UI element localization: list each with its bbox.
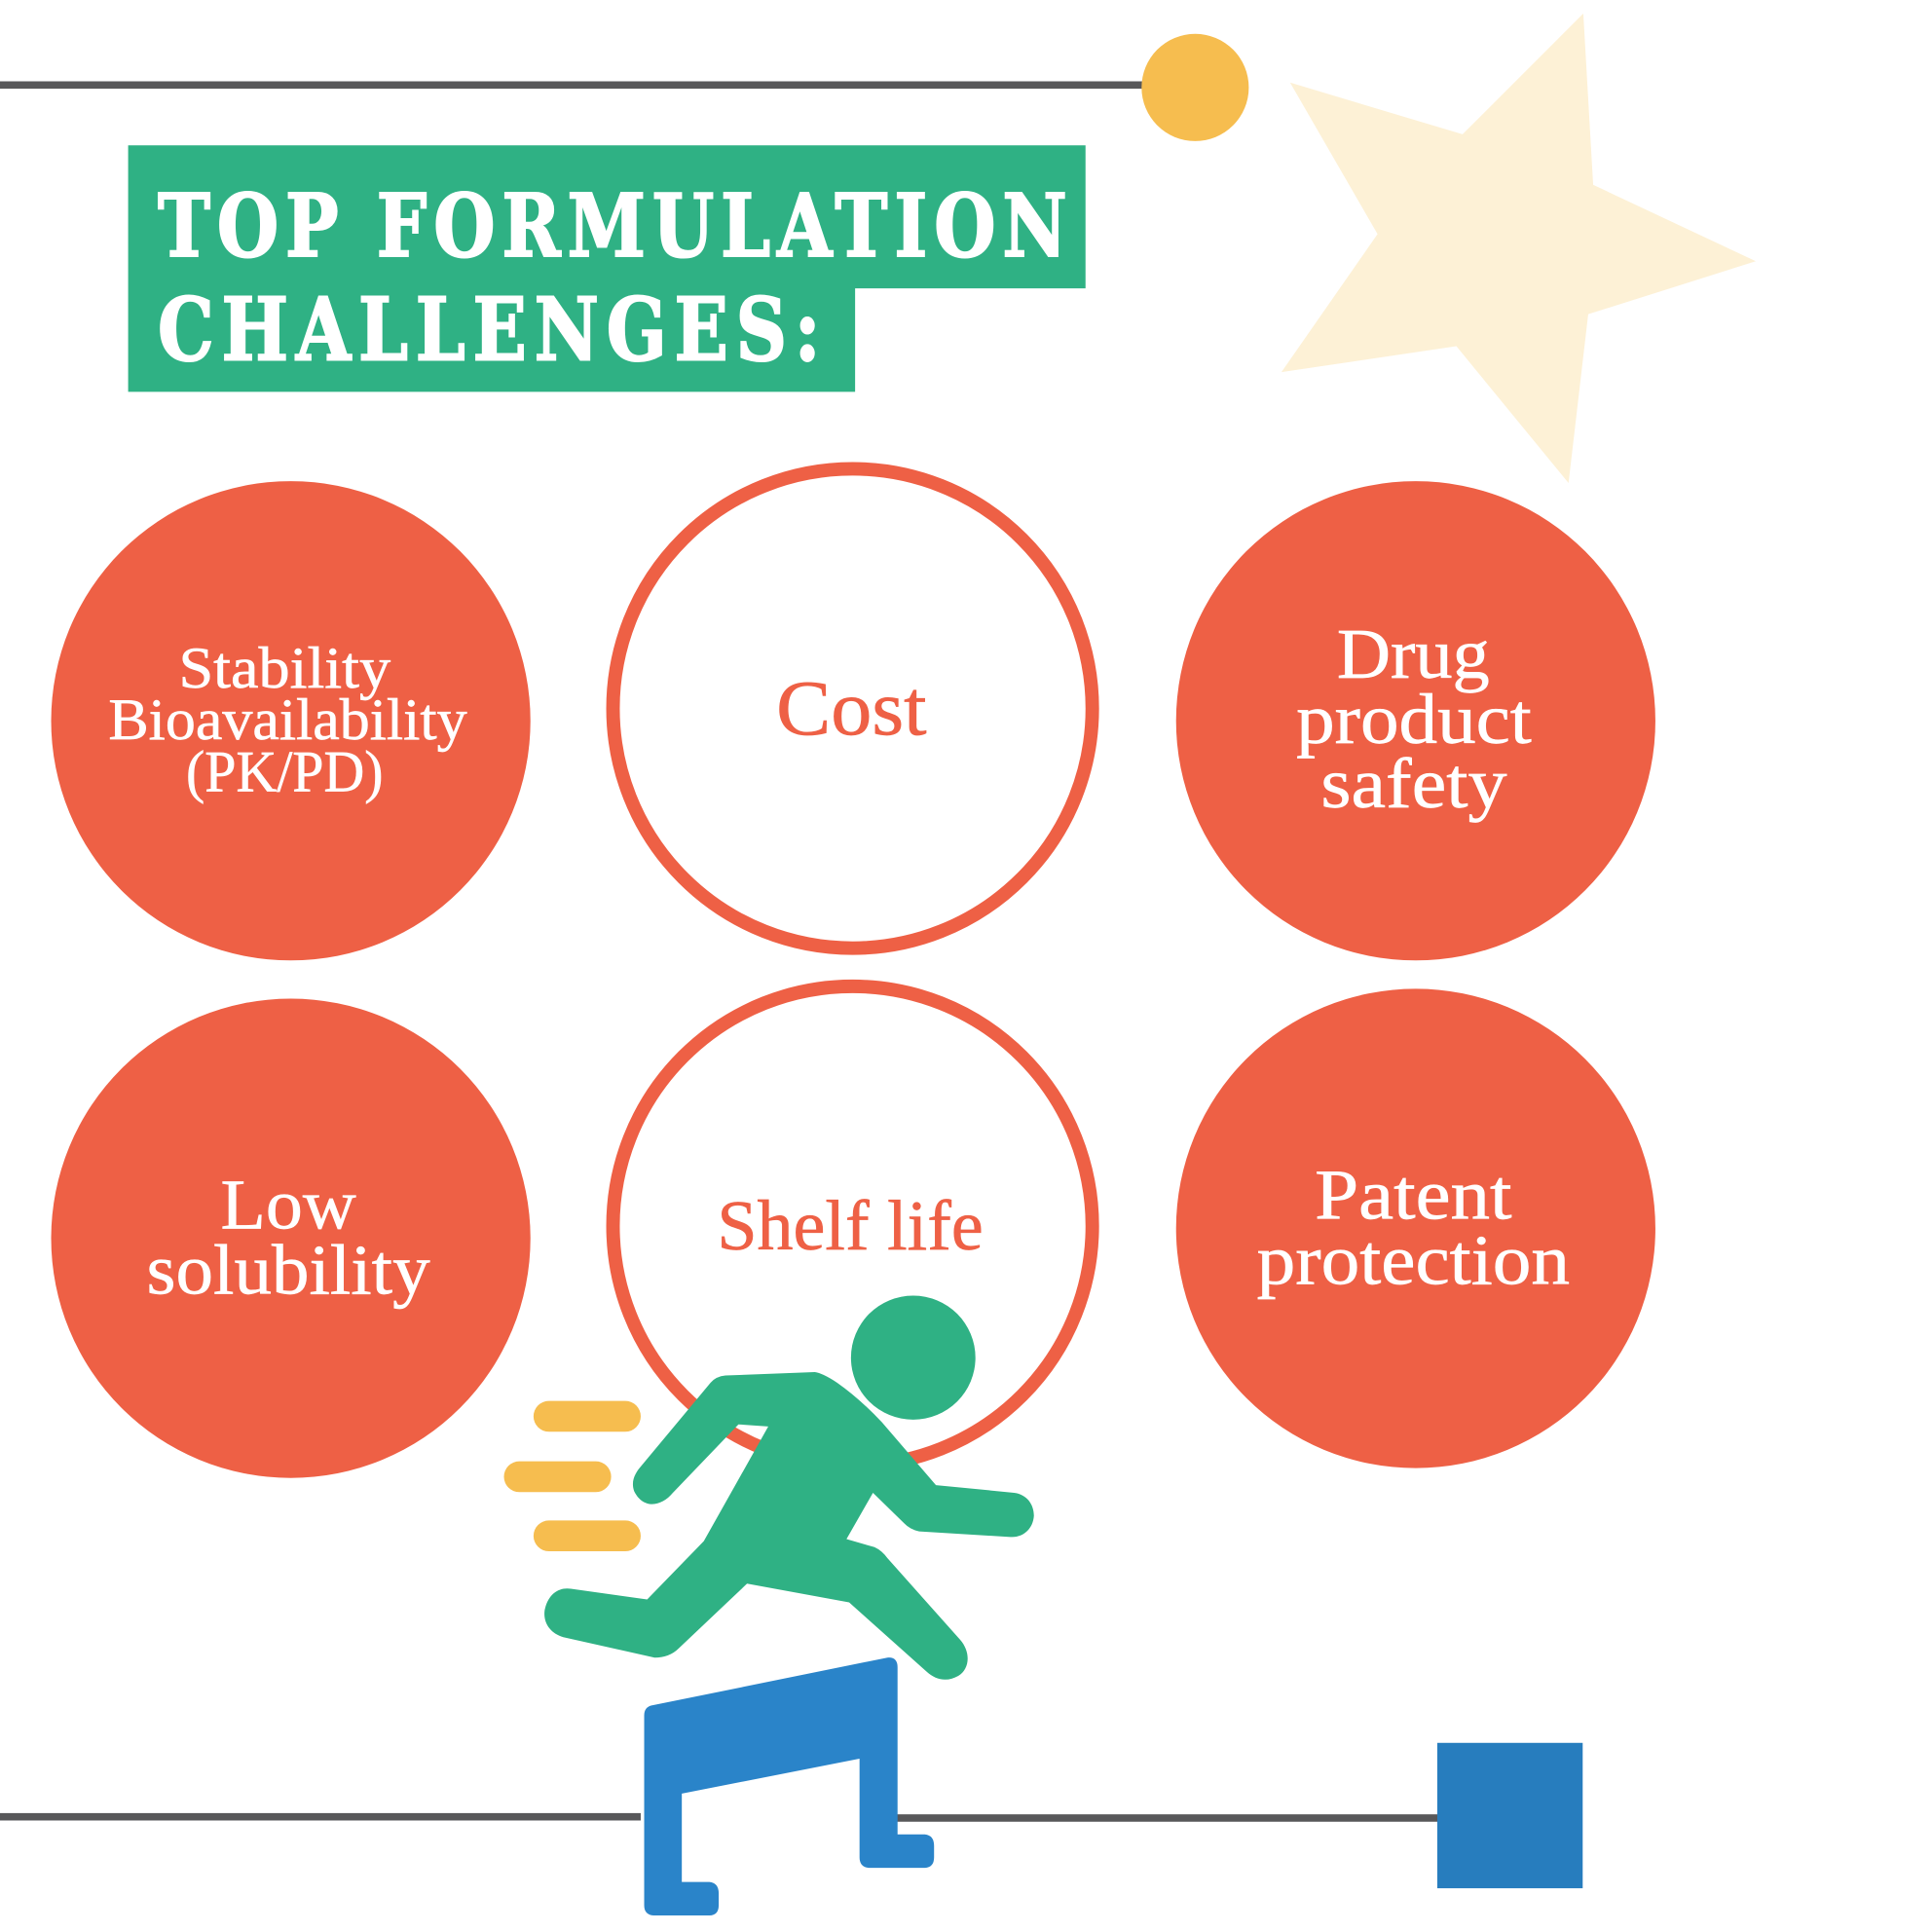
circle: cost: Cost — [776, 664, 927, 752]
circle: patent protection: Patent — [1315, 1155, 1512, 1234]
bottom line left — [0, 1813, 641, 1820]
title banner: CHALLENGES: — [158, 279, 821, 381]
circle: stability and bioavailability: (PK/PD) — [186, 739, 384, 804]
circle: cost — [613, 468, 1093, 948]
icon: running figure — [544, 1296, 1034, 1680]
circle: low solubility: Low — [220, 1166, 356, 1245]
circle: stability and bioavailability: Stability — [178, 636, 391, 701]
speed lines — [504, 1401, 641, 1551]
circle: patent protection — [1176, 988, 1655, 1468]
blue square — [1437, 1743, 1582, 1888]
circle: drug product safety: safety — [1320, 744, 1507, 823]
circle: drug product safety: product — [1296, 680, 1532, 759]
circle: low solubility: solubility — [147, 1231, 430, 1310]
circle: shelf life — [613, 986, 1093, 1466]
title banner: TOP FORMULATION — [158, 176, 1067, 278]
circle: drug product safety: Drug — [1337, 614, 1490, 693]
circle: stability and bioavailability: Bioavailability — [108, 687, 467, 753]
circle: stability and bioavailability — [52, 481, 531, 960]
circle: patent protection: protection — [1257, 1220, 1570, 1299]
circle: drug product safety — [1176, 481, 1655, 960]
top line — [0, 82, 1146, 89]
circle: low solubility — [52, 999, 531, 1478]
icon: hurdle — [645, 1657, 934, 1915]
decorative star — [1282, 14, 1756, 483]
bottom line right — [897, 1814, 1441, 1822]
circle: shelf life: Shelf life — [717, 1186, 984, 1265]
title banner — [129, 145, 1086, 391]
decorative yellow circle — [1141, 34, 1248, 141]
